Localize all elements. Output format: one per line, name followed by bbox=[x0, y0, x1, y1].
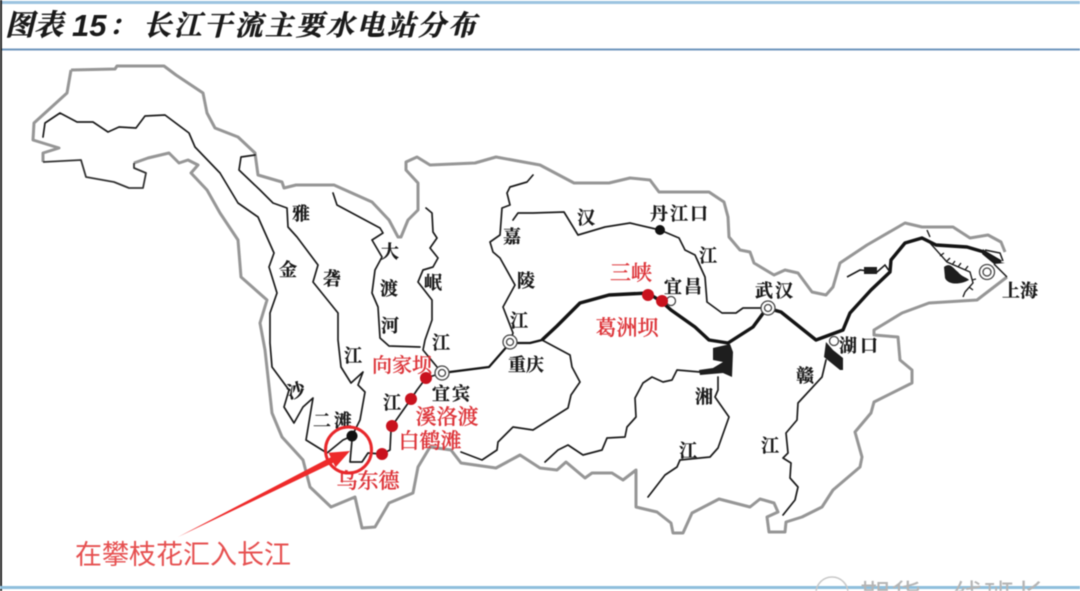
river and city labels: 江 bbox=[761, 436, 779, 456]
title: 15 bbox=[72, 8, 107, 43]
Jinsha lower reach bbox=[350, 373, 442, 462]
tributary: Zi river bbox=[545, 370, 700, 462]
river and city labels: 武汉 bbox=[755, 281, 795, 301]
river and city labels: 江 bbox=[679, 441, 697, 461]
basin boundary bbox=[33, 66, 1007, 533]
river and city labels: 宜宾 bbox=[432, 383, 472, 404]
river and city labels: 二滩 bbox=[313, 411, 355, 431]
title: 长江干流主要水电站分布 bbox=[143, 11, 480, 42]
tributary: Dadu river bbox=[333, 193, 420, 347]
title: 图表 bbox=[5, 10, 66, 42]
station labels: 三峡 bbox=[610, 261, 652, 285]
watermark bbox=[816, 577, 1046, 591]
map: Yangtze basin bbox=[33, 66, 1038, 533]
river and city labels: 宜昌 bbox=[664, 277, 704, 297]
tributary: Xiang river bbox=[648, 377, 729, 497]
river and city labels: 金 bbox=[279, 260, 297, 280]
river and city labels bbox=[279, 204, 1038, 461]
title: ： bbox=[108, 11, 136, 42]
tributary: Min river bbox=[418, 208, 442, 373]
river and city labels: 上海 bbox=[1002, 281, 1038, 301]
title bbox=[5, 8, 480, 43]
river and city labels: 岷 bbox=[424, 273, 442, 293]
main stem: Yangtze river bbox=[442, 340, 542, 373]
river and city labels: 嘉 bbox=[503, 227, 521, 247]
river and city labels: 汉 bbox=[577, 208, 595, 228]
station labels: 葛洲坝 bbox=[596, 316, 659, 340]
Dongting lake bbox=[699, 344, 733, 377]
station labels: 白鹤滩 bbox=[398, 429, 462, 453]
tributary: Jinsha river bbox=[43, 113, 352, 453]
river and city labels: 渡 bbox=[380, 278, 398, 299]
river and city labels: 丹江口 bbox=[650, 204, 710, 224]
river and city labels: 雅 bbox=[292, 204, 310, 224]
river and city labels: 赣 bbox=[796, 366, 815, 386]
callout arrow bbox=[178, 451, 350, 537]
tributary: Jialing river bbox=[490, 175, 533, 342]
river and city labels: 江 bbox=[510, 311, 528, 331]
river and city labels: 重庆 bbox=[508, 355, 544, 375]
river and city labels: 湖口 bbox=[839, 336, 881, 356]
river and city labels: 江 bbox=[344, 346, 362, 366]
station labels bbox=[336, 261, 659, 493]
station labels: 向家坝 bbox=[372, 354, 433, 377]
river and city labels: 江 bbox=[699, 246, 717, 266]
boundary: dark upper segment bbox=[43, 160, 146, 188]
river and city labels: 湘 bbox=[695, 387, 713, 407]
river and city labels: 江 bbox=[383, 393, 401, 413]
callout: confluence circle bbox=[326, 427, 372, 473]
hydropower station markers bbox=[376, 289, 668, 460]
tributary: Yalong river bbox=[239, 155, 365, 434]
tributary: Han river bbox=[513, 212, 764, 313]
river and city labels: 河 bbox=[381, 316, 399, 336]
station labels: 溪洛渡 bbox=[416, 405, 478, 429]
tributary: Gan river bbox=[783, 360, 826, 515]
river and city labels: 江 bbox=[432, 333, 450, 353]
river and city labels: 砻 bbox=[323, 268, 341, 289]
tributary: Wu river bbox=[461, 340, 580, 460]
river and city labels: 沙 bbox=[285, 378, 309, 403]
city markers bbox=[435, 264, 994, 380]
black site markers bbox=[655, 225, 665, 235]
river and city labels: 大 bbox=[381, 242, 399, 262]
callout text: 在攀枝花汇入长江 bbox=[75, 540, 291, 570]
Poyang lake bbox=[824, 342, 843, 370]
station labels: 乌东德 bbox=[336, 469, 400, 493]
Taihu lake and channels bbox=[847, 230, 1007, 297]
river and city labels: 陵 bbox=[517, 271, 535, 291]
